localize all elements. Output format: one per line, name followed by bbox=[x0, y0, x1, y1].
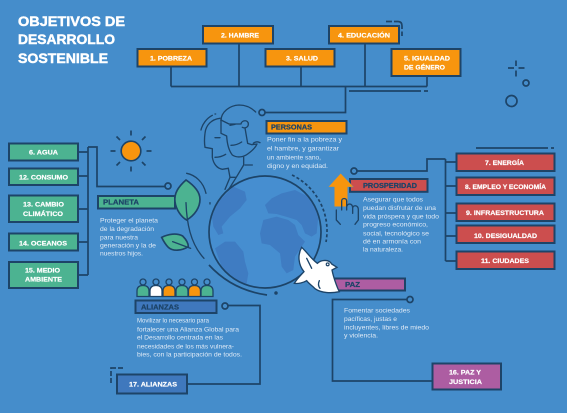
text: personas bbox=[267, 136, 343, 170]
goal 1 bbox=[138, 49, 206, 66]
goal 6: 6. AGUA bbox=[29, 150, 58, 156]
goal 16: 16. PAZ Y bbox=[449, 370, 481, 376]
goal 4: 4. EDUCACIÓN bbox=[338, 30, 390, 40]
goal 14 bbox=[9, 234, 78, 250]
panel: prosperidad bbox=[328, 173, 439, 253]
text: planeta bbox=[100, 217, 158, 257]
text: paz bbox=[344, 307, 429, 339]
heading: prosperidad: PROSPERIDAD bbox=[363, 181, 417, 190]
globe orbit arcs bbox=[209, 175, 327, 295]
goal 11: 11. CIUDADES bbox=[481, 258, 529, 265]
goal 14: 14. OCEANOS bbox=[19, 240, 67, 247]
connector: paz bbox=[332, 296, 432, 381]
icon: arrow and hand bbox=[328, 173, 358, 224]
text: planeta: generación y la de bbox=[100, 242, 156, 249]
goal 16: JUSTICIA bbox=[449, 379, 482, 386]
text: prosperidad: Asegurar que todos bbox=[363, 196, 424, 203]
heading: planeta: PLANETA bbox=[103, 198, 139, 207]
text: paz: pacíficas, justas e bbox=[344, 316, 397, 323]
goal 9: 9. INFRAESTRUCTURA bbox=[466, 210, 544, 217]
title bbox=[18, 14, 125, 66]
text: prosperidad: progreso económico, bbox=[363, 221, 428, 228]
heading: paz bbox=[333, 278, 405, 290]
text: alianzas bbox=[137, 317, 242, 358]
text: paz: Fomentar sociedades bbox=[344, 307, 411, 314]
icon: six people bbox=[137, 279, 213, 296]
text: paz: y violencia. bbox=[344, 332, 378, 339]
green goal boxes bbox=[9, 144, 78, 288]
goal 7: 7. ENERGÍA bbox=[485, 158, 524, 167]
title: OBJETIVOS DE bbox=[18, 14, 125, 29]
heading: alianzas: ALIANZAS bbox=[141, 302, 179, 312]
goal 17: 17. ALIANZAS bbox=[129, 382, 177, 388]
globe landmasses bbox=[212, 187, 318, 285]
text: personas: un ambiente sano, bbox=[267, 154, 321, 161]
goal 3 bbox=[266, 49, 334, 66]
text: planeta: para nuestra bbox=[100, 234, 138, 241]
goal 15: 15. MEDIO bbox=[25, 268, 60, 275]
panel: personas bbox=[201, 105, 346, 190]
goal 13 bbox=[9, 196, 78, 222]
goal 3: 3. SALUD bbox=[286, 56, 318, 62]
title: SOSTENIBLE bbox=[18, 51, 108, 66]
text: prosperidad: puedan disfrutar de una bbox=[363, 205, 436, 212]
connector tree: personas goals bbox=[171, 22, 428, 116]
heading: personas bbox=[266, 121, 346, 134]
goal 15: AMBIENTE bbox=[25, 277, 62, 284]
text: alianzas: necesidades de los más vulnera- bbox=[137, 343, 234, 350]
goal 6 bbox=[9, 144, 78, 160]
globe bbox=[209, 175, 327, 295]
panel: planeta bbox=[98, 173, 210, 258]
connector: alianzas bbox=[111, 303, 260, 384]
text: planeta: Proteger el planeta bbox=[100, 217, 158, 224]
text: planeta: nuestros hijos. bbox=[100, 250, 143, 257]
icon: decorative plus and circles bbox=[506, 60, 529, 106]
text: prosperidad: social, tecnológico se bbox=[363, 230, 429, 237]
text: alianzas: bies, con la participación de todos. bbox=[137, 351, 242, 358]
connector tree: planeta goals bbox=[78, 147, 171, 275]
goal 13: CLIMÁTICO bbox=[23, 209, 63, 218]
icon: sun bbox=[110, 130, 152, 172]
orange goal boxes bbox=[138, 26, 460, 76]
goal 10: 10. DESIGUALDAD bbox=[474, 233, 537, 240]
text: personas: el hambre, y garantizar bbox=[267, 145, 340, 152]
text: prosperidad: la naturaleza. bbox=[363, 246, 403, 253]
goal 16 bbox=[432, 364, 501, 390]
heading: personas: PERSONAS bbox=[271, 123, 312, 132]
goal 5: 5. IGUALDAD bbox=[404, 55, 450, 62]
goal 2: 2. HAMBRE bbox=[221, 32, 259, 40]
goal 12: 12. CONSUMO bbox=[19, 174, 68, 182]
connector tree: prosperidad goals bbox=[351, 148, 554, 261]
text: alianzas: fortalecer una Alianza Global para bbox=[137, 326, 239, 333]
goal 4 bbox=[329, 26, 399, 44]
icon: two faces bbox=[201, 105, 260, 190]
goal 17 bbox=[117, 374, 187, 394]
heading: paz: PAZ bbox=[345, 280, 361, 289]
text: paz: incluyentes, libres de miedo bbox=[344, 324, 429, 331]
goal 15 bbox=[9, 262, 78, 288]
text: prosperidad: dé en armonía con bbox=[363, 238, 421, 245]
text: prosperidad: vida próspera y que todo bbox=[363, 213, 439, 220]
text: prosperidad bbox=[363, 196, 439, 253]
icon: leaves bbox=[162, 173, 210, 258]
goal 8: 8. EMPLEO Y ECONOMÍA bbox=[465, 182, 546, 191]
goal 2 bbox=[203, 26, 273, 44]
title: DESARROLLO bbox=[18, 32, 115, 47]
panel: alianzas bbox=[111, 279, 260, 394]
text: alianzas: Movilizar lo necesario para bbox=[137, 317, 209, 324]
text: personas: Poner fin a la pobreza y bbox=[267, 136, 343, 143]
goal 5: DE GÉNERO bbox=[404, 62, 445, 72]
red goal boxes bbox=[456, 154, 554, 269]
goal 1: 1. POBREZA bbox=[150, 56, 192, 62]
text: planeta: de la degradación bbox=[100, 226, 154, 233]
goal 5 bbox=[392, 49, 460, 76]
icon: dove bbox=[294, 247, 339, 293]
panel: paz bbox=[294, 247, 501, 390]
text: alianzas: el Desarrollo centrada en las bbox=[137, 334, 224, 341]
goal 13: 13. CAMBIO bbox=[23, 202, 64, 208]
text: personas: digno y en equidad. bbox=[267, 163, 328, 170]
goal 12 bbox=[9, 168, 78, 185]
heading: alianzas bbox=[136, 300, 216, 313]
